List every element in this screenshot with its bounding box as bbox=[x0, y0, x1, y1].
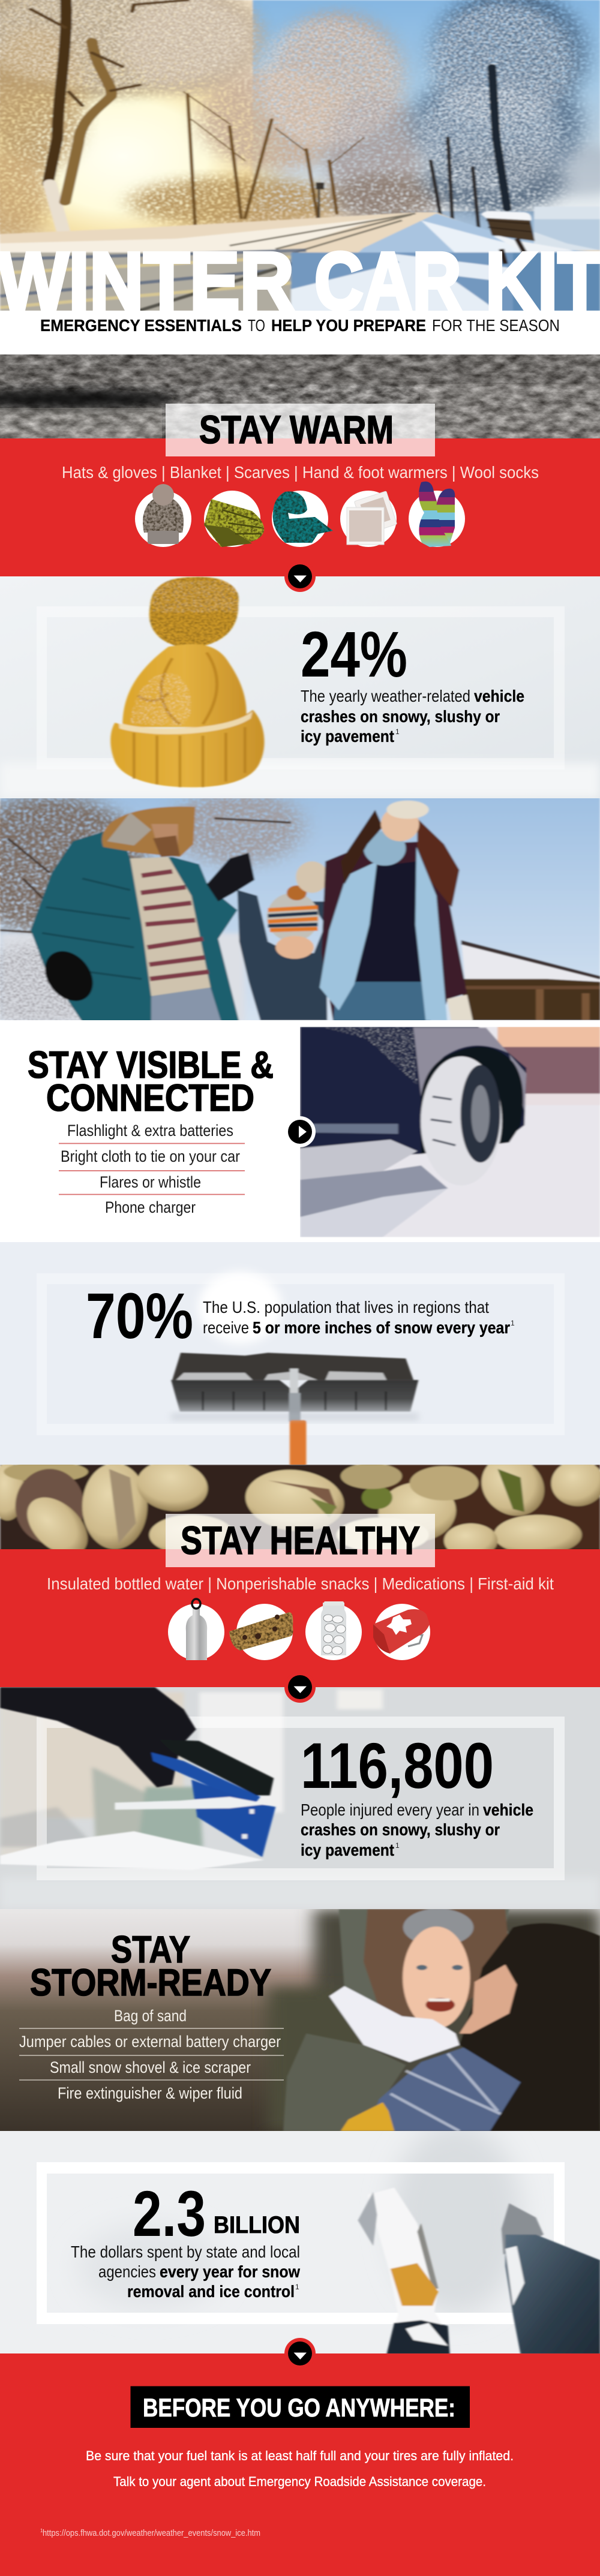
icon: hand warmers bbox=[340, 491, 397, 547]
heading box bbox=[166, 1514, 435, 1567]
icon: scarf bbox=[272, 491, 333, 547]
description: agencies bbox=[98, 2262, 156, 2281]
panel: 2.3 billion statistic bbox=[0, 2123, 600, 2354]
heading: STAY VISIBLE & bbox=[28, 1044, 274, 1086]
description: crashes on snowy, slushy or bbox=[301, 1820, 500, 1839]
description bbox=[203, 1298, 515, 1337]
description bbox=[301, 687, 524, 746]
footnote: 1 bbox=[40, 2528, 43, 2533]
panel: stay visible and connected bbox=[0, 1020, 600, 1242]
description: removal and ice control bbox=[127, 2282, 295, 2301]
list: Small snow shovel & ice scraper bbox=[50, 2058, 251, 2076]
list: Bag of sand bbox=[114, 2007, 187, 2025]
description: icy pavement bbox=[301, 1841, 394, 1859]
heading: BEFORE YOU GO ANYWHERE: bbox=[143, 2394, 455, 2422]
value: 116,800 bbox=[301, 1729, 494, 1802]
photo: snow shovel bbox=[171, 1352, 418, 1466]
icon: first-aid kit bbox=[373, 1604, 430, 1660]
icon: down arrow 2 bbox=[284, 1672, 316, 1703]
description: vehicle bbox=[474, 687, 524, 705]
description: every year for snow bbox=[160, 2262, 300, 2281]
woman bbox=[320, 801, 473, 1022]
description: 1 bbox=[395, 1841, 400, 1850]
value bbox=[133, 2177, 300, 2250]
value: 24% bbox=[301, 618, 407, 690]
icon: down arrow 1 bbox=[284, 561, 316, 592]
description: icy pavement bbox=[301, 727, 394, 746]
subtitle bbox=[40, 316, 560, 335]
heading: stay warm: STAY WARM bbox=[199, 407, 394, 452]
photo: snowy boots bbox=[358, 2187, 600, 2354]
frame bbox=[37, 606, 565, 770]
description: The yearly weather-related bbox=[301, 687, 470, 705]
background bbox=[0, 576, 600, 798]
heading box bbox=[166, 404, 435, 456]
icon: granola bar bbox=[229, 1604, 293, 1660]
photo: car tire in snow bbox=[300, 1027, 600, 1237]
heading: stay healthy: STAY HEALTHY bbox=[181, 1518, 420, 1562]
cabin bbox=[461, 940, 600, 1021]
icon: play arrow bbox=[284, 1116, 316, 1147]
description: crashes on snowy, slushy or bbox=[301, 707, 500, 726]
description: 1 bbox=[511, 1319, 515, 1327]
icon: jar of tablets bbox=[305, 1601, 362, 1660]
list: Bright cloth to tie on your car bbox=[61, 1147, 240, 1165]
panel: 116,800 statistic bbox=[0, 1687, 600, 1909]
panel: 24% statistic bbox=[0, 576, 600, 798]
advice bbox=[86, 2448, 514, 2489]
advice: Talk to your agent about Emergency Roadside Assistance coverage. bbox=[113, 2474, 486, 2489]
list: Fire extinguisher & wiper fluid bbox=[58, 2084, 242, 2102]
description: vehicle bbox=[483, 1801, 533, 1819]
photo: mother and child in snow bbox=[0, 1908, 600, 2132]
hero photo: snowy road at sunrise bbox=[0, 0, 600, 311]
photo: pistachios bbox=[0, 1451, 600, 1563]
value: BILLION bbox=[214, 2212, 300, 2238]
description: 1 bbox=[395, 728, 400, 736]
title: WINTER bbox=[0, 235, 294, 326]
advice: Be sure that your fuel tank is at least half full and your tires are fully inflated. bbox=[86, 2448, 514, 2463]
red band bbox=[0, 438, 600, 576]
title: CAR bbox=[314, 235, 461, 326]
icon: blanket bbox=[204, 491, 264, 547]
description: receive bbox=[203, 1318, 249, 1337]
panel: 70% statistic bbox=[0, 1242, 600, 1466]
description: The dollars spent by state and local bbox=[71, 2243, 300, 2261]
list: Phone charger bbox=[105, 1198, 196, 1216]
photo: family walking in snow bbox=[0, 790, 600, 1025]
list bbox=[19, 2007, 284, 2102]
man bbox=[31, 807, 254, 1022]
item list: Hats & gloves | Blanket | Scarves | Hand & foot warmers | Wool socks bbox=[62, 463, 539, 482]
description bbox=[71, 2243, 300, 2301]
photo: glove holding ice scraper bbox=[0, 1687, 275, 1870]
panel: stay healthy bbox=[0, 1514, 600, 1687]
subtitle: FOR THE SEASON bbox=[432, 316, 560, 335]
value: 2.3 bbox=[133, 2177, 206, 2250]
description: 5 or more inches of snow every year bbox=[253, 1318, 510, 1337]
list: Flashlight & extra batteries bbox=[67, 1122, 233, 1140]
subtitle: EMERGENCY ESSENTIALS bbox=[40, 316, 242, 335]
heading: STAY bbox=[111, 1929, 190, 1971]
panel: stay visible and connected: CONNECTED bbox=[46, 1077, 254, 1119]
icon: wool socks bbox=[409, 482, 465, 547]
background bbox=[0, 2131, 600, 2353]
frame bbox=[37, 1273, 565, 1435]
list bbox=[59, 1122, 245, 1216]
footnote: https://ops.fhwa.dot.gov/weather/weather_events/snow_ice.htm bbox=[43, 2528, 260, 2538]
icon: down arrow 3 bbox=[284, 2338, 316, 2369]
photo: mother and child in snow: STORM-READY bbox=[30, 1962, 271, 2004]
red band bbox=[0, 1549, 600, 1687]
subtitle: TO bbox=[248, 316, 265, 335]
list: Jumper cables or external battery charger bbox=[19, 2033, 281, 2051]
value: 70% bbox=[86, 1279, 193, 1352]
child bbox=[238, 861, 328, 1021]
icon: metal water bottle bbox=[168, 1599, 224, 1660]
subtitle: HELP YOU PREPARE bbox=[271, 316, 426, 335]
frame bbox=[37, 2162, 565, 2324]
description bbox=[301, 1801, 533, 1859]
background bbox=[0, 1242, 600, 1465]
red band bbox=[0, 2353, 600, 2576]
description: People injured every year in bbox=[301, 1801, 479, 1819]
background bbox=[0, 1687, 600, 1909]
photo: knit wool texture bbox=[0, 354, 600, 439]
description: The U.S. population that lives in regions that bbox=[203, 1298, 489, 1316]
title bbox=[0, 235, 600, 326]
list: Flares or whistle bbox=[100, 1173, 201, 1191]
icon: beanie bbox=[135, 484, 191, 547]
description: 1 bbox=[295, 2283, 299, 2291]
panel: before you go anywhere bbox=[0, 2353, 600, 2576]
heading box bbox=[131, 2386, 470, 2428]
panel: stay warm bbox=[0, 404, 600, 576]
frame bbox=[37, 1717, 565, 1880]
white background bbox=[0, 1020, 600, 1242]
photo: yellow knit hat bbox=[110, 577, 264, 787]
icon: bench bbox=[482, 211, 574, 264]
item list: Insulated bottled water | Nonperishable snacks | Medications | First-aid kit bbox=[47, 1574, 554, 1593]
